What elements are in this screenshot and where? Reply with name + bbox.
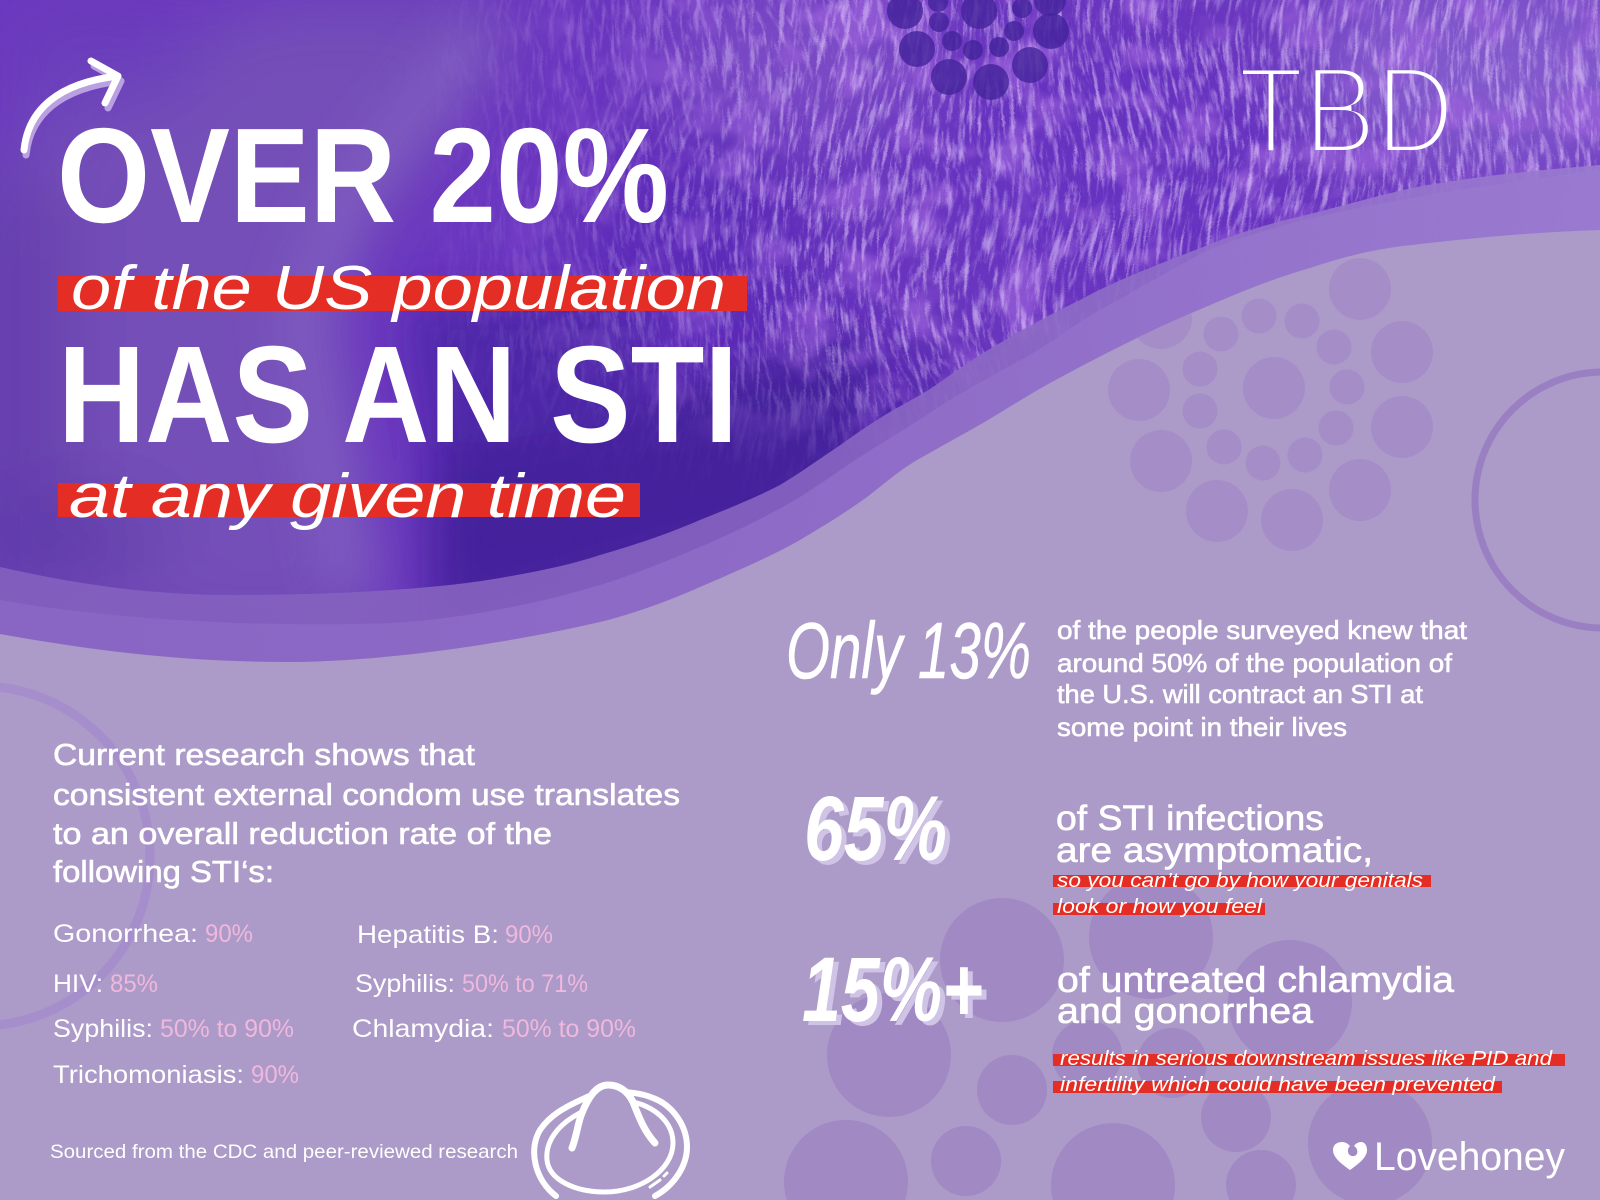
icon: heart xyxy=(1333,1142,1367,1170)
stat text: asymptomatic: of STI infections xyxy=(1056,799,1324,838)
stat number: 15%+: 15%+ xyxy=(802,939,983,1041)
title line: has an STI: HAS AN STI xyxy=(58,318,738,472)
intro paragraph: consistent external condom use translates xyxy=(53,777,680,812)
reduction rates list: Syphilis: xyxy=(53,1015,153,1043)
stat text: asymptomatic xyxy=(1056,799,1373,870)
stat text: asymptomatic: are asymptomatic, xyxy=(1056,831,1373,870)
red bar: population xyxy=(58,276,747,311)
stat text: survey: of the people surveyed knew that xyxy=(1057,615,1468,645)
red callout: genitals: so you can’t go by how your genitals xyxy=(1057,870,1423,892)
title line: over 20%: OVER 20% xyxy=(57,100,669,251)
reduction rates list: Trichomoniasis: xyxy=(53,1061,244,1089)
reduction rates list: 50% to 90% xyxy=(160,1015,294,1043)
stat number: only 13%: Only 13% xyxy=(786,606,1031,695)
red bar: any given time xyxy=(58,483,640,517)
wave: upper translucent band xyxy=(0,165,1600,700)
reduction rates list: 85% xyxy=(110,970,158,998)
title line: of the US population: of the US population xyxy=(71,254,726,323)
reduction rates list: Chlamydia: xyxy=(352,1015,494,1043)
background: purple fur photo xyxy=(0,0,1600,620)
stat: 65% xyxy=(804,778,1431,918)
stat text: survey: around 50% of the population of xyxy=(1057,648,1453,678)
reduction rates list: 50% to 71% xyxy=(462,970,588,998)
intro paragraph xyxy=(53,737,680,889)
stat text: survey xyxy=(1057,615,1468,742)
icon: condom xyxy=(534,1085,687,1196)
title xyxy=(57,100,747,531)
stat number shadow: 65%: 65% xyxy=(809,782,952,884)
stat text: chlamydia: and gonorrhea xyxy=(1057,990,1314,1031)
red callout: genitals: look or how you feel xyxy=(1057,896,1263,918)
reduction rates list: 50% to 90% xyxy=(502,1015,636,1043)
ring: right xyxy=(1475,372,1600,628)
red callout: downstream issues: infertility which could have been prevented xyxy=(1060,1074,1496,1096)
stat number: 65%: 65% xyxy=(804,778,947,880)
ring: left xyxy=(0,686,150,1026)
logo: TBD: TBD xyxy=(1238,42,1454,180)
stat: 15%+ xyxy=(802,939,1565,1096)
icon: curved arrow xyxy=(24,61,121,155)
red callout: genitals xyxy=(1053,870,1431,918)
wordmark: Lovehoney xyxy=(1374,1135,1565,1179)
stat text: chlamydia: of untreated chlamydia xyxy=(1057,959,1455,1000)
red callout: downstream issues: results in serious downstream issues like PID and xyxy=(1060,1048,1553,1070)
dark dot cluster xyxy=(887,0,1069,100)
reduction rates list: Syphilis: xyxy=(355,970,455,998)
stat: only 13% xyxy=(786,606,1468,742)
intro paragraph: Current research shows that xyxy=(53,737,475,772)
reduction rates list: Hepatitis B: xyxy=(357,921,499,949)
intro paragraph: following STI‘s: xyxy=(53,854,274,889)
reduction rates list: 90% xyxy=(205,920,253,948)
source note: Sourced from the CDC and peer-reviewed research xyxy=(50,1141,518,1163)
red callout: downstream issues xyxy=(1053,1048,1565,1096)
intro paragraph: to an overall reduction rate of the xyxy=(53,816,552,851)
stat text: chlamydia xyxy=(1057,959,1455,1031)
light dot cluster xyxy=(1108,258,1433,551)
logo: Lovehoney xyxy=(1333,1135,1565,1179)
bottom right circles xyxy=(784,875,1432,1200)
reduction rates list: HIV: xyxy=(53,970,103,998)
stat text: survey: some point in their lives xyxy=(1057,712,1347,742)
reduction rates list xyxy=(53,920,636,1089)
stat text: survey: the U.S. will contract an STI at xyxy=(1057,679,1424,709)
reduction rates list: 90% xyxy=(505,921,553,949)
wave: middle band xyxy=(0,170,1600,700)
reduction rates list: 90% xyxy=(251,1061,299,1089)
stat number shadow: 15%+: 15%+ xyxy=(807,943,988,1045)
title line: at any given time: at any given time xyxy=(69,462,626,531)
reduction rates list: Gonorrhea: xyxy=(53,920,198,948)
